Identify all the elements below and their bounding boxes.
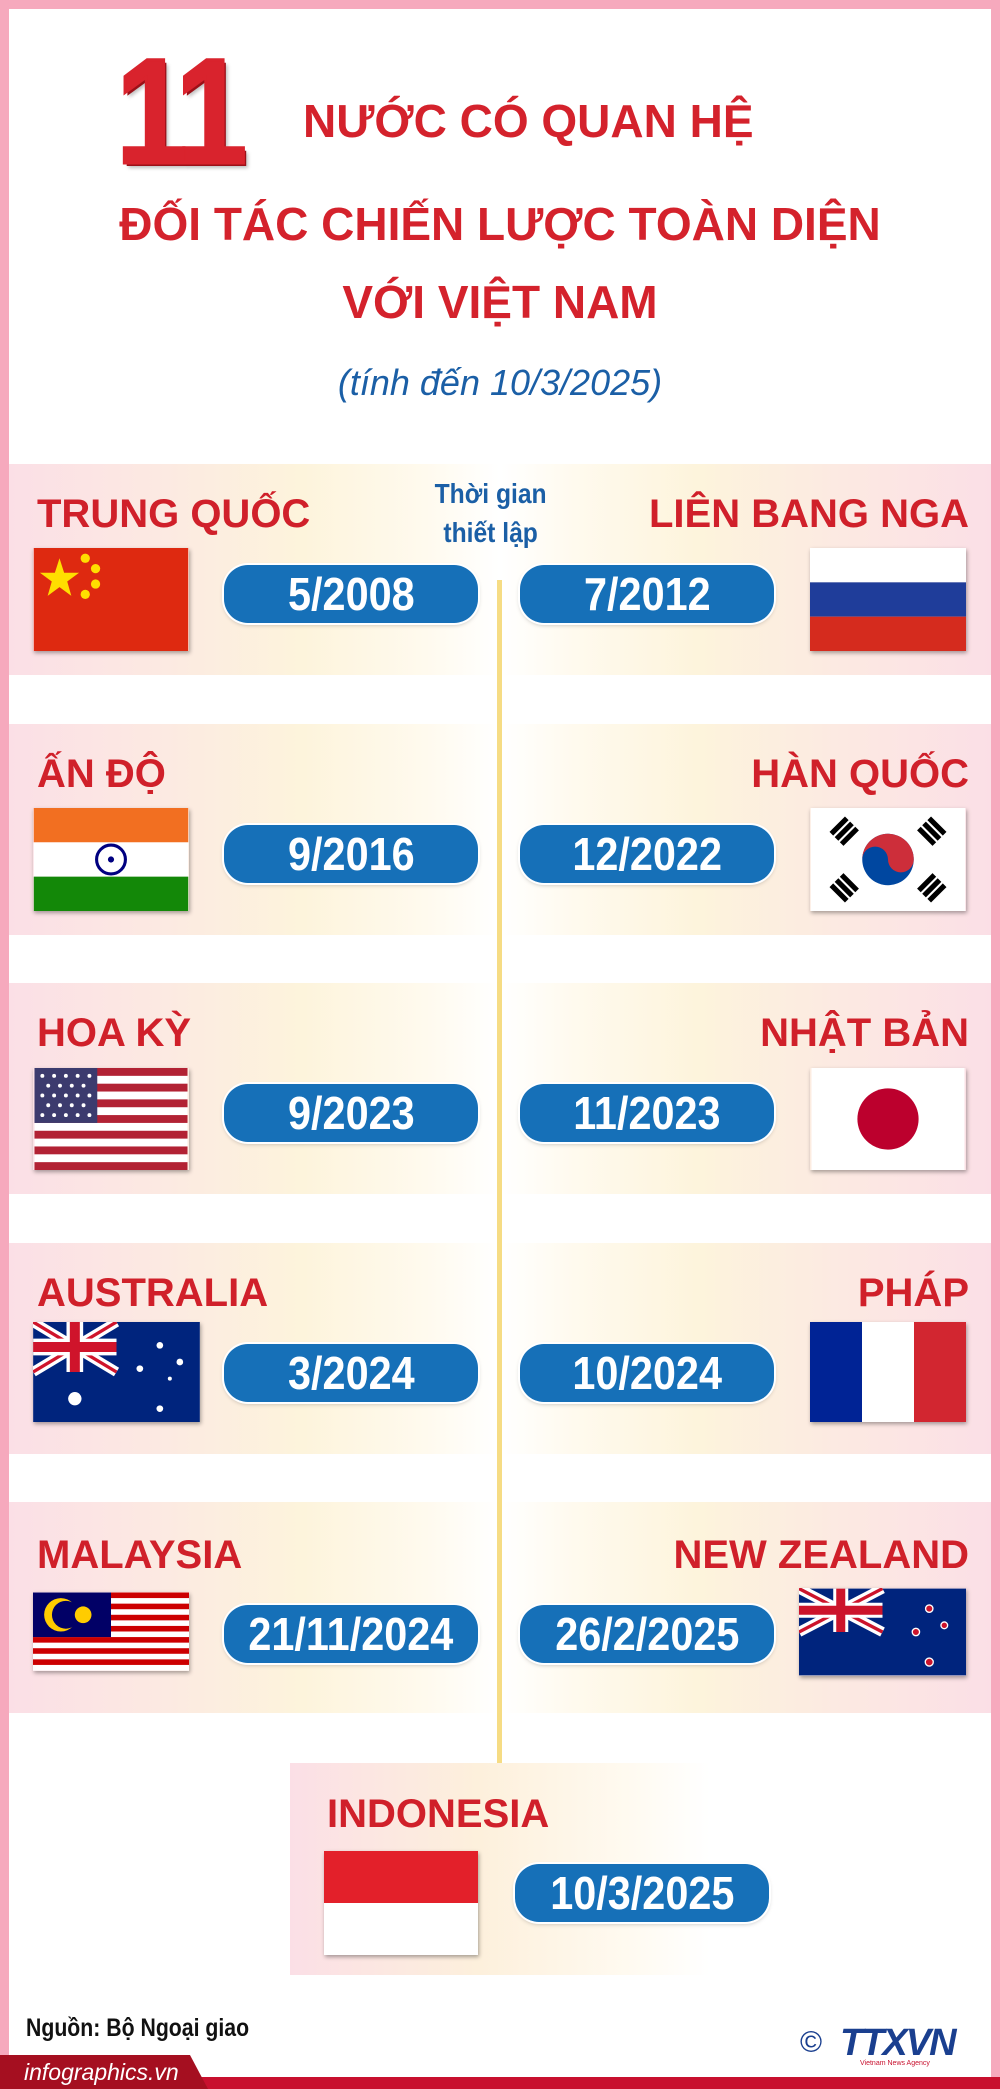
title line 3: VỚI VIỆT NAM [342,276,658,328]
flag: New Zealand [799,1588,966,1676]
number 11: 11 [116,27,242,195]
date: 9/2016 [224,825,478,883]
date: 12/2022 [520,825,774,883]
logo: TTXVN [800,2022,958,2067]
flag: Russia [810,548,966,651]
flag: Indonesia [324,1851,478,1955]
logo: TTXVN: TTXVN [840,2022,955,2064]
date: 10/2024 [520,1344,774,1402]
name: Indonesia: INDONESIA [327,1792,549,1836]
date: 21/11/2024: 21/11/2024 [249,1608,453,1660]
bands [9,464,499,675]
name: Russia: LIÊN BANG NGA [649,492,969,536]
date: 9/2016: 9/2016 [288,828,414,880]
name: USA: HOA KỲ [37,1011,191,1055]
name: India: ẤN ĐỘ [37,752,166,796]
date: 12/2022: 12/2022 [572,828,722,880]
row 5: Malaysia / New Zealand [32,1533,970,1680]
source: Nguồn: Bộ Ngoại giao [26,2014,249,2042]
name: China: TRUNG QUỐC [37,492,310,536]
date: 5/2008 [224,565,478,623]
timeline line [497,580,502,1763]
flag: Japan [810,1068,966,1170]
name: New Zealand: NEW ZEALAND [673,1533,969,1577]
timeline label: Thời gian [435,478,547,509]
row 1: China / Russia [32,491,970,656]
date: 3/2024 [224,1344,478,1402]
row 2: India / Korea [32,751,970,916]
footer tab: infographics.vn [0,2055,208,2089]
flag: China [33,548,189,651]
date: 7/2012 [520,565,774,623]
timeline label [434,478,547,548]
name: France: PHÁP [858,1271,969,1315]
date: 11/2023 [520,1084,774,1142]
title line 1: NƯỚC CÓ QUAN HỆ [303,95,754,147]
date: 7/2012: 7/2012 [584,568,710,620]
logo: TTXVN: Vietnam News Agency [860,2060,930,2067]
date: 10/2024: 10/2024 [572,1347,722,1399]
flag: France [810,1322,966,1422]
flag: Australia [33,1322,200,1422]
row 6: Indonesia [322,1792,772,1960]
title [119,95,881,328]
name: Japan: NHẬT BẢN [760,1011,969,1055]
date: 26/2/2025: 26/2/2025 [555,1608,739,1660]
flag: USA [33,1068,189,1170]
subtitle: (tính đến 10/3/2025) [338,362,662,403]
date: 10/3/2025 [515,1864,769,1922]
date: 9/2023: 9/2023 [288,1087,414,1139]
logo: TTXVN: © [800,2026,822,2059]
flag: India [33,808,189,911]
flag: Malaysia [33,1592,189,1671]
footer bar [0,2077,1000,2089]
title line 2: ĐỐI TÁC CHIẾN LƯỢC TOÀN DIỆN [119,198,881,250]
date: 11/2023: 11/2023 [573,1087,721,1139]
indonesia band [290,1763,710,1975]
name: Australia: AUSTRALIA [37,1271,268,1315]
date: 5/2008: 5/2008 [288,568,414,620]
timeline label: thiết lập [444,517,538,548]
date: 3/2024: 3/2024 [288,1347,414,1399]
name: Malaysia: MALAYSIA [37,1533,242,1577]
date: 9/2023 [224,1084,478,1142]
footer tab: infographics.vn: infographics.vn [24,2059,179,2085]
flag: Korea [810,808,966,911]
row 4: Australia / France [32,1270,970,1426]
date: 26/2/2025 [520,1605,774,1663]
name: Korea: HÀN QUỐC [751,752,969,796]
date: 10/3/2025: 10/3/2025 [550,1867,734,1919]
row 3: USA / Japan [32,1010,970,1174]
